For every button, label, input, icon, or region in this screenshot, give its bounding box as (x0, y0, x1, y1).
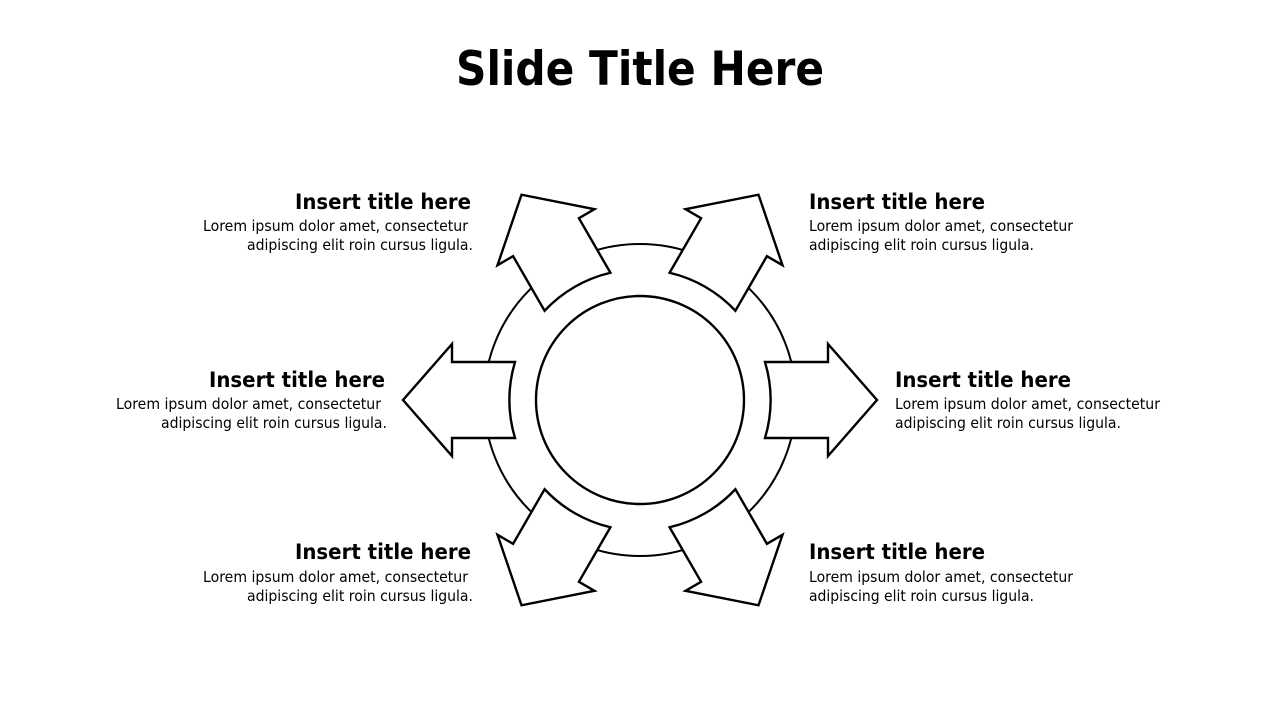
outer ring (484, 244, 796, 556)
text block: upper right (809, 190, 1074, 254)
text block: lower left (203, 540, 473, 605)
text block: middle right: Insert title here (895, 368, 1071, 392)
arrow: lower right (654, 480, 807, 633)
text block: middle left: Insert title here (209, 368, 385, 392)
text block: lower left: Insert title here (295, 540, 471, 564)
text block: lower right: adipiscing elit roin cursus ligula. (809, 587, 1034, 605)
text block: upper left: Insert title here (295, 190, 471, 214)
text block: lower left: Lorem ipsum dolor amet, consectetur (203, 568, 469, 586)
arrow: lower left (473, 480, 626, 633)
text block: middle left: Lorem ipsum dolor amet, consectetur (116, 395, 382, 413)
text block: middle right: Lorem ipsum dolor amet, consectetur (895, 395, 1161, 413)
arrow: left (403, 344, 515, 456)
text block: middle left: adipiscing elit roin cursus ligula. (161, 414, 387, 432)
inner circle (536, 296, 744, 504)
text block: lower right (809, 540, 1074, 605)
text block: lower left: adipiscing elit roin cursus ligula. (247, 587, 473, 605)
text block: upper right: Lorem ipsum dolor amet, consectetur (809, 217, 1074, 235)
text block: lower right: Insert title here (809, 540, 985, 564)
text block: upper left: Lorem ipsum dolor amet, consectetur (203, 217, 469, 235)
text block: upper left: adipiscing elit roin cursus ligula. (247, 236, 473, 254)
text block: upper right: Insert title here (809, 190, 985, 214)
title: Slide Title Here (456, 42, 824, 97)
arrow: right (765, 344, 877, 456)
arrow: upper right (654, 167, 807, 320)
text block: middle left (116, 368, 387, 432)
text block: upper left (203, 190, 473, 254)
arrow: upper left (473, 167, 626, 320)
text block: lower right: Lorem ipsum dolor amet, consectetur (809, 568, 1074, 586)
text block: middle right: adipiscing elit roin cursus ligula. (895, 414, 1121, 432)
text block: middle right (895, 368, 1161, 432)
text block: upper right: adipiscing elit roin cursus ligula. (809, 236, 1034, 254)
